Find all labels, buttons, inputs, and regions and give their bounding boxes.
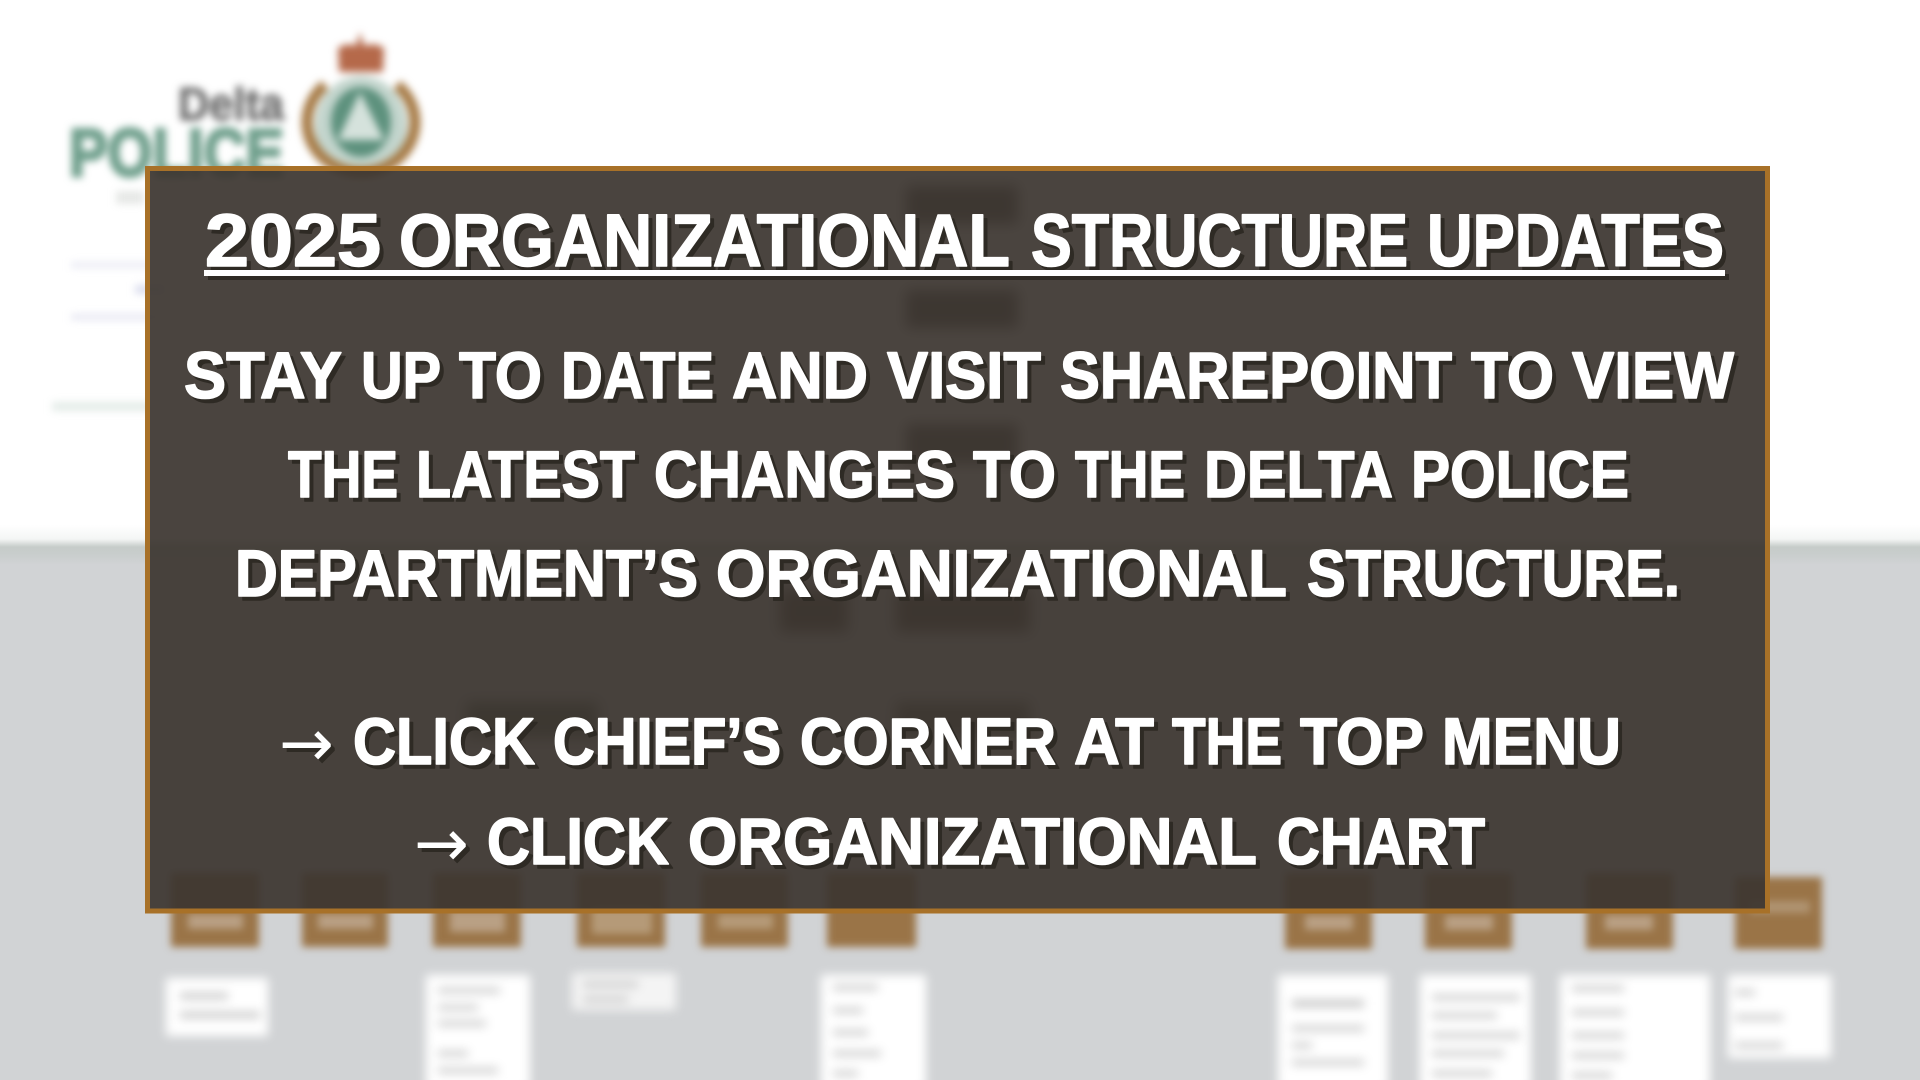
text line: stay up to date: VISIT: [887, 338, 1041, 412]
background: blurred brown org chart boxes: [171, 873, 1822, 949]
background: blurred central org chart boxes: [466, 186, 1030, 738]
text line: click organizational chart: [487, 804, 1485, 878]
title with underline: UPDATES: [1427, 199, 1724, 282]
text line: organizational structure: [235, 536, 1680, 610]
text line: click chief's corner: AT: [1074, 704, 1154, 778]
text line: stay up to date: DATE: [561, 338, 714, 412]
text line: stay up to date: AND: [732, 338, 868, 412]
text line: latest changes: THE: [288, 437, 398, 511]
background: gray lower band: [0, 525, 1920, 1080]
text line: click organizational chart: CLICK: [487, 804, 669, 878]
text line: click chief's corner: THE: [1172, 704, 1282, 778]
title with underline: STRUCTURE: [1031, 199, 1408, 282]
text line: latest changes: THE: [1075, 437, 1185, 511]
title with underline: 2025: [205, 199, 381, 282]
text line: organizational structure: STRUCTURE.: [1307, 536, 1680, 610]
text line: click chief's corner: CHIEF’S: [553, 704, 781, 778]
text line: organizational structure: ORGANIZATIONAL: [716, 536, 1287, 610]
arrow: step one: →: [279, 705, 334, 782]
text line: click chief's corner: [353, 704, 1621, 778]
text line: latest changes: DELTA: [1204, 437, 1393, 511]
text line: click organizational chart: ORGANIZATIONAL: [688, 804, 1257, 878]
panel: announcement overlay: [148, 168, 1768, 911]
text line: stay up to date: TO: [459, 338, 542, 412]
text line: stay up to date: UP: [361, 338, 441, 412]
text line: click organizational chart: CHART: [1277, 804, 1485, 878]
text line: latest changes: CHANGES: [654, 437, 955, 511]
text line: stay up to date: VIEW: [1572, 338, 1735, 412]
text line: latest changes: POLICE: [1411, 437, 1629, 511]
arrow: step two: →: [414, 805, 469, 882]
text line: latest changes: LATEST: [416, 437, 635, 511]
title with underline: [204, 199, 1725, 282]
background: blurred header lines: [52, 262, 165, 411]
text line: stay up to date: STAY: [184, 338, 342, 412]
logo: Delta Police: [69, 32, 415, 204]
logo: Delta Police: Delta: [178, 78, 284, 130]
text line: latest changes: [288, 437, 1629, 511]
text line: stay up to date: TO: [1471, 338, 1554, 412]
title with underline: ORGANIZATIONAL: [399, 199, 1010, 282]
logo: Delta Police: POLICE: [69, 115, 284, 191]
text line: click chief's corner: CORNER: [800, 704, 1056, 778]
text line: stay up to date: SHAREPOINT: [1060, 338, 1452, 412]
text line: click chief's corner: TOP: [1300, 704, 1424, 778]
text line: latest changes: TO: [973, 437, 1056, 511]
text line: click chief's corner: CLICK: [353, 704, 535, 778]
text line: organizational structure: DEPARTMENT’S: [235, 536, 698, 610]
text line: stay up to date: [184, 338, 1735, 412]
background: blurred white org chart lists: [166, 973, 1831, 1080]
text line: click chief's corner: MENU: [1442, 704, 1621, 778]
